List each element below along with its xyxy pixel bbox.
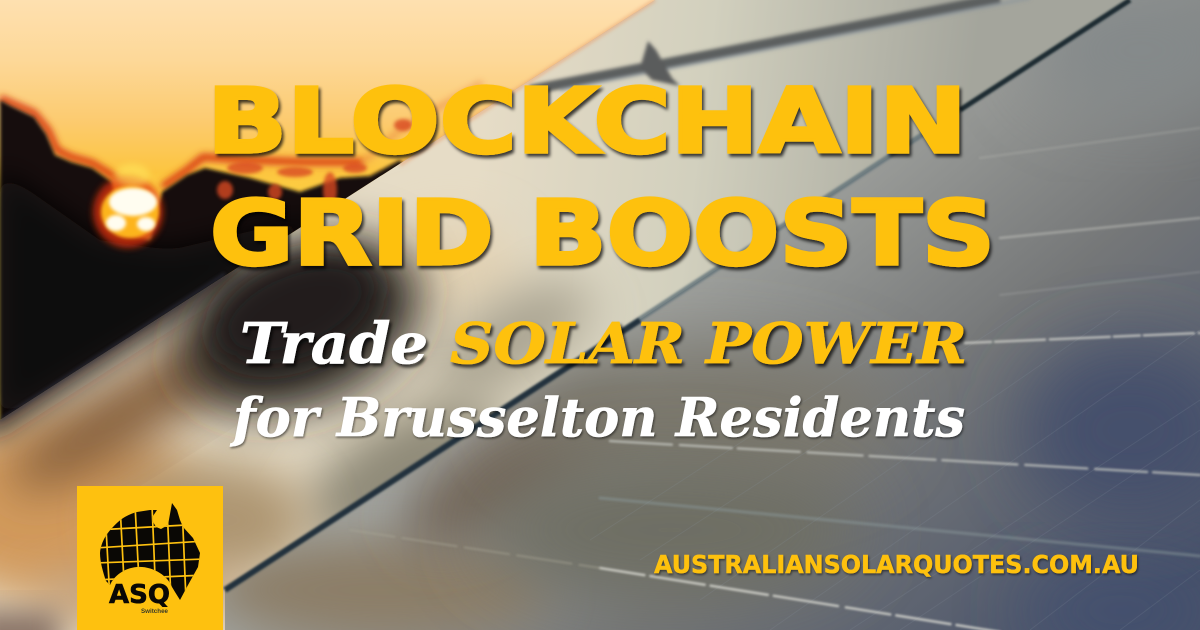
tree line silhouette	[0, 83, 500, 430]
website url: AUSTRALIANSOLARQUOTES.COM.AU	[654, 550, 1139, 579]
faint diagonal scratches	[590, 336, 1200, 630]
sky	[0, 0, 655, 420]
sun	[101, 164, 159, 238]
sky and panel boundary	[400, 0, 655, 165]
logo: ASQ	[77, 486, 223, 630]
mounting rail	[530, 0, 1030, 90]
title: BLOCKCHAIN: BLOCKCHAIN	[207, 69, 967, 173]
subtitle: SOLAR POWER: SOLAR POWER	[450, 311, 967, 377]
lower-left edge highlight	[0, 274, 225, 420]
cell grid lines	[350, 128, 1200, 630]
icon: Australia solar grid map	[100, 503, 200, 600]
ASQ wordmark: ASQ	[109, 580, 170, 610]
panel edge line	[225, 0, 1130, 590]
subtitle: Trade: Trade	[240, 311, 428, 377]
subtitle: for Brusselton Residents: for Brusselton Residents	[229, 387, 965, 449]
Switchee wordmark: Switchee	[141, 609, 169, 615]
title: GRID BOOSTS: GRID BOOSTS	[210, 181, 995, 285]
